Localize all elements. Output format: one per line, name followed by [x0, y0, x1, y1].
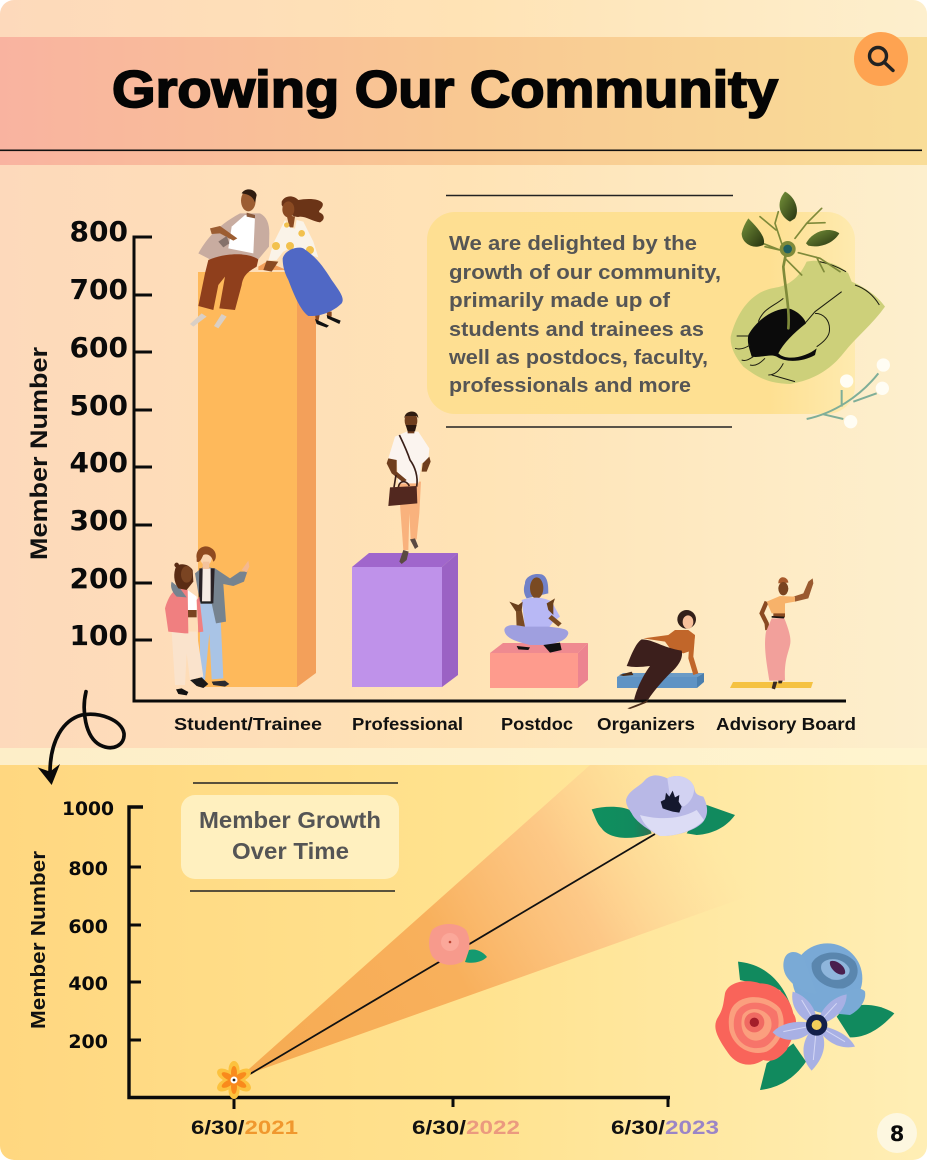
header banner — [0, 32, 927, 165]
label: member growth over time — [181, 783, 399, 891]
figure: standing woman on advisory board bar — [762, 577, 813, 689]
axes — [129, 807, 670, 1109]
category labels: Advisory Board — [716, 714, 856, 734]
y axis numbers: 500 — [70, 389, 128, 422]
x axis dates — [191, 1118, 719, 1139]
y axis numbers: 100 — [70, 619, 128, 652]
figure: man with bag standing on professional bar — [387, 411, 431, 564]
trend line — [250, 834, 655, 1074]
icon: hand holding neuron seedling — [731, 192, 890, 428]
y axis numbers: 800 — [70, 215, 128, 248]
x axis dates: 6/30/ 2021 — [191, 1118, 299, 1139]
bar chart: members by category — [26, 215, 856, 734]
callout text: We are delighted by the — [449, 232, 697, 255]
red rose — [715, 981, 796, 1065]
callout text: professionals and more — [449, 374, 691, 397]
y axis numbers: 300 — [70, 504, 128, 537]
y axis numbers: 800 — [68, 858, 108, 880]
bar: postdoc — [490, 643, 588, 688]
category labels: Postdoc — [501, 714, 573, 734]
icon: search button — [854, 32, 908, 86]
y axis numbers: 1000 — [62, 798, 114, 820]
icon: anemone flower 2023 — [592, 775, 735, 838]
callout text: primarily made up of — [449, 289, 670, 312]
category labels: Organizers — [597, 714, 695, 734]
purple star flower — [773, 992, 855, 1071]
icon: flower bouquet — [715, 943, 894, 1090]
y axis title: Member Number — [28, 851, 50, 1029]
callout text: students and trainees as — [449, 318, 704, 341]
arrow: curly pointer to lower chart — [38, 692, 124, 785]
figure: seated couple on tall bar — [190, 189, 343, 328]
y axis numbers: 400 — [70, 446, 128, 479]
leaves — [738, 962, 894, 1090]
line chart: member growth over time — [28, 765, 780, 1139]
category labels: Student/Trainee — [174, 714, 322, 734]
y axis numbers: 200 — [68, 1031, 108, 1053]
y axis numbers — [70, 215, 128, 652]
growth beam — [240, 765, 780, 1077]
y axis — [134, 237, 846, 701]
category labels: Professional — [352, 714, 463, 734]
icon: pink flower 2022 — [429, 924, 487, 965]
y axis numbers: 600 — [70, 331, 128, 364]
y axis numbers: 600 — [68, 916, 108, 938]
figure: reclining woman on organizers bar — [619, 610, 698, 709]
bar: organizers — [617, 673, 704, 688]
x axis dates: 6/30/ 2023 — [611, 1118, 719, 1139]
y axis numbers: 400 — [68, 973, 108, 995]
y axis numbers — [62, 798, 114, 1053]
page number badge — [877, 1113, 917, 1153]
x axis dates: 6/30/ 2022 — [412, 1118, 520, 1139]
y axis title: Member Number — [26, 347, 53, 560]
page number badge: 8 — [890, 1122, 904, 1146]
bar: student/trainee — [198, 272, 316, 687]
figure: meditating woman on postdoc bar — [504, 574, 568, 653]
icon: small orange flower 2021 — [215, 1061, 253, 1099]
bar: professional — [352, 553, 458, 687]
y axis numbers: 200 — [70, 562, 128, 595]
callout text: well as postdocs, faculty, — [448, 346, 708, 369]
callout: community growth — [427, 196, 855, 427]
label: member growth over time: Member Growth — [199, 807, 381, 833]
bar: advisory board — [730, 682, 813, 688]
y axis numbers: 700 — [70, 273, 128, 306]
callout text — [448, 232, 721, 397]
category labels — [174, 714, 856, 734]
label: member growth over time: Over Time — [232, 838, 349, 864]
figure: couple standing beside tall bar — [165, 546, 249, 695]
title: Growing Our Community — [112, 61, 778, 119]
callout text: growth of our community, — [449, 261, 721, 284]
blue rose — [783, 943, 865, 1015]
